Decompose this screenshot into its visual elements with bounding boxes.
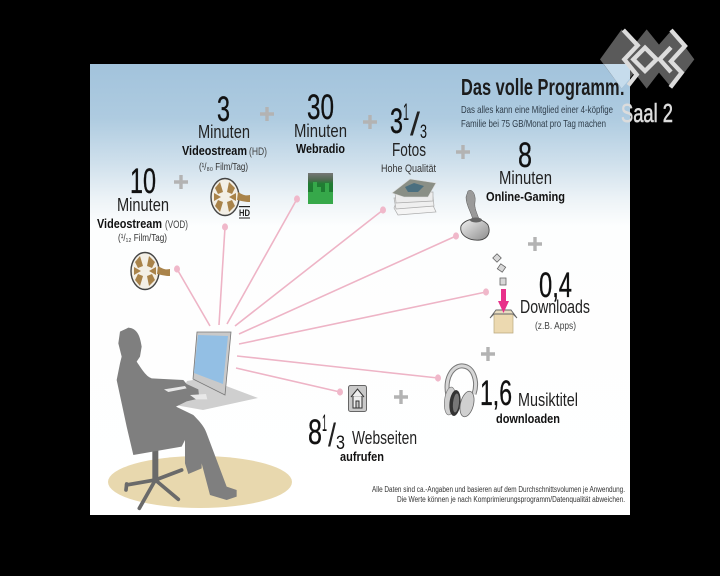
stat: 8 1/3 Webseiten aufrufen: Webseiten xyxy=(352,428,417,448)
stat: 3 1/3 Fotos: 3 xyxy=(420,122,427,143)
plus xyxy=(394,390,408,404)
desk xyxy=(175,378,258,410)
stat: 8 1/3 Webseiten aufrufen: / xyxy=(328,417,336,453)
plus xyxy=(174,175,188,189)
stat: 3 1/3 Fotos: / xyxy=(410,106,420,142)
icon: joystick xyxy=(461,190,489,240)
title: Das alles kann eine Mitglied einer 4-köpfige xyxy=(461,104,613,116)
stat: 10 Minuten Videostream VOD: Videostream xyxy=(97,216,162,231)
icon: home xyxy=(348,386,366,412)
stat: 8 Minuten Online-Gaming: Minuten xyxy=(499,168,552,188)
plus xyxy=(481,347,495,361)
title: Das volle Programm: xyxy=(461,74,625,100)
stat: 0,4 Downloads: Downloads xyxy=(520,297,590,317)
stat: 1,6 Musiktitel downloaden: downloaden xyxy=(496,411,560,426)
stat: 8 Minuten Online-Gaming: Online-Gaming xyxy=(486,189,565,204)
stat: 3 1/3 Fotos: 1 xyxy=(403,99,409,126)
plus xyxy=(363,115,377,129)
logo: Saal 2 broadcast bug: Saal 2 xyxy=(621,98,673,128)
plus xyxy=(456,145,470,159)
icon: film reel VOD xyxy=(131,252,170,290)
stat: 3 1/3 Fotos xyxy=(381,99,436,175)
icon: person at computer xyxy=(117,328,237,508)
stat: 3 Minuten Videostream HD: Minuten xyxy=(198,122,250,142)
title xyxy=(461,74,625,130)
stat: 10 Minuten Videostream VOD xyxy=(97,162,188,244)
icon: computer monitor xyxy=(193,332,231,395)
stat: 1,6 Musiktitel downloaden: 1,6 xyxy=(480,374,512,413)
stat: 10 Minuten Videostream VOD: Minuten xyxy=(117,195,169,215)
footnote: Die Werte können je nach Komprimierungsprogramm/Datenqualität abweichen. xyxy=(397,495,625,504)
icon: headphones xyxy=(443,366,476,418)
title: Familie bei 75 GB/Monat pro Tag machen xyxy=(461,118,606,130)
stat: 3 Minuten Videostream HD: 3 xyxy=(217,90,230,129)
stat: 8 1/3 Webseiten aufrufen: aufrufen xyxy=(340,449,384,464)
stat: 0,4 Downloads: (z.B. Apps) xyxy=(535,320,576,332)
stat: 30 Minuten Webradio: Webradio xyxy=(296,141,345,156)
stat: 0,4 Downloads xyxy=(520,266,590,332)
stat: 10 Minuten Videostream VOD: 10 xyxy=(130,162,156,201)
plus xyxy=(528,237,542,251)
stat: 3 Minuten Videostream HD: (¹/₈₀ Film/Tag) xyxy=(199,162,248,173)
stat: 1,6 Musiktitel downloaden xyxy=(480,374,578,426)
stat: 3 1/3 Fotos: 3 xyxy=(390,102,403,141)
stat: 0,4 Downloads: 0,4 xyxy=(539,266,572,305)
stat: 3 Minuten Videostream HD xyxy=(182,90,267,173)
stat: 30 Minuten Webradio xyxy=(294,88,347,156)
panel: infographic background xyxy=(90,64,630,515)
stat: 3 1/3 Fotos: Hohe Qualität xyxy=(381,163,436,175)
stat: 1,6 Musiktitel downloaden: Musiktitel xyxy=(518,390,578,410)
stat: 10 Minuten Videostream VOD: (VOD) xyxy=(165,219,188,231)
stat: 30 Minuten Webradio: Minuten xyxy=(294,121,347,141)
stat: 8 1/3 Webseiten aufrufen: 8 xyxy=(308,413,322,452)
connector lines xyxy=(174,195,489,396)
stat: 8 1/3 Webseiten aufrufen xyxy=(308,410,417,464)
footnote: Alle Daten sind ca.-Angaben und basieren auf dem Durchschnittsvolumen je Anwendung. xyxy=(372,485,625,494)
stat: 8 1/3 Webseiten aufrufen: 1 xyxy=(322,410,327,437)
floor ellipse xyxy=(108,456,292,508)
icon: film reel HD xyxy=(211,178,250,218)
logo: Saal 2 broadcast bug xyxy=(600,29,694,128)
stat: 3 Minuten Videostream HD: Videostream xyxy=(182,143,247,158)
icon: equalizer xyxy=(308,173,333,204)
plus xyxy=(260,107,274,121)
icon: download box xyxy=(490,254,517,333)
stat: 3 1/3 Fotos: Fotos xyxy=(392,140,426,160)
stat: 30 Minuten Webradio: 30 xyxy=(307,88,334,127)
stat: 8 Minuten Online-Gaming: 8 xyxy=(518,136,532,175)
footnote xyxy=(372,485,625,504)
stat: 10 Minuten Videostream VOD: (¹/₁₂ Film/Tag) xyxy=(118,233,167,244)
stat: 3 Minuten Videostream HD: (HD) xyxy=(249,146,267,158)
icon: photo stack xyxy=(392,179,436,215)
icon: film reel HD: HD xyxy=(239,208,250,218)
stat: 8 Minuten Online-Gaming xyxy=(486,136,565,204)
stat: 8 1/3 Webseiten aufrufen: 3 xyxy=(336,433,345,454)
